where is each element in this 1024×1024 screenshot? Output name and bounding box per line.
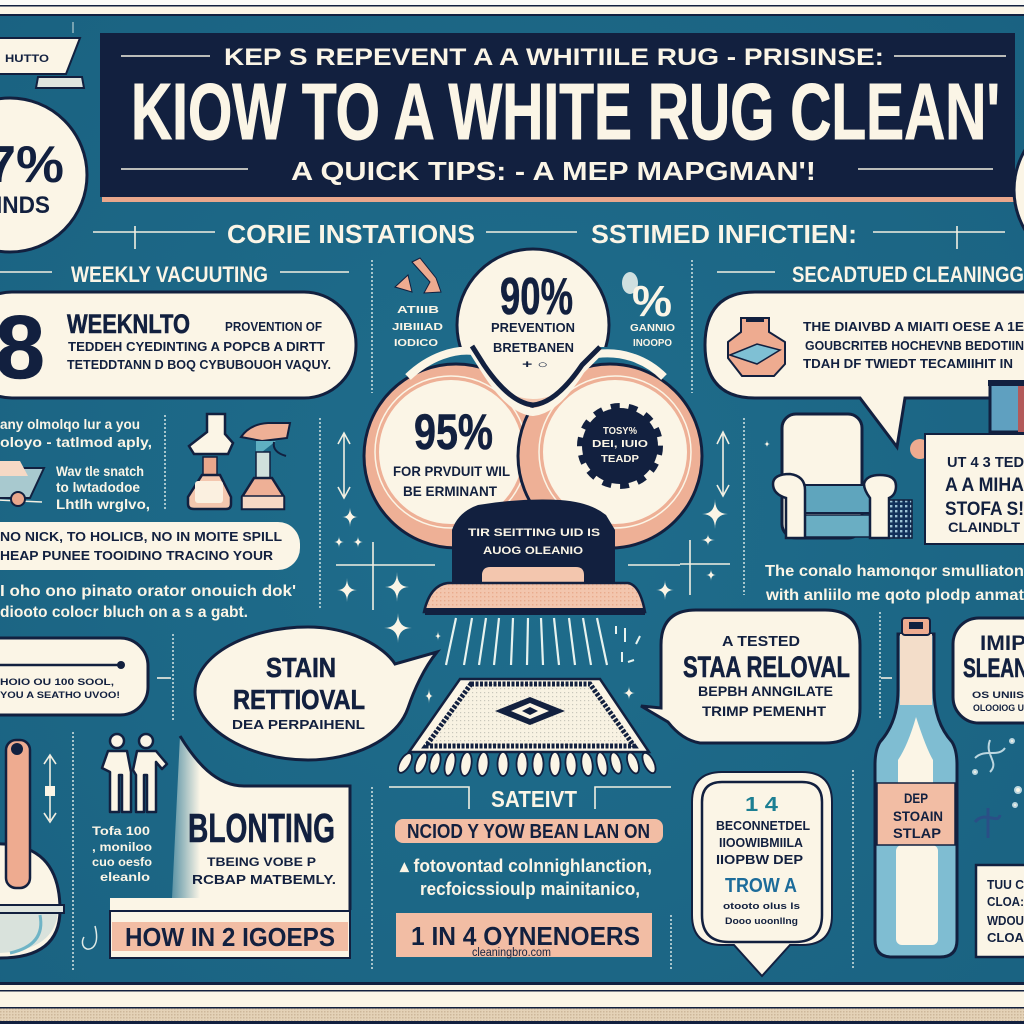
peach label bar: NCIOD Y YOW BEAN LAN ON — [407, 821, 650, 843]
title kicker: KEP S REPEVENT A A WHITIILE RUG - PRISINSE: — [224, 44, 884, 71]
text block: figures caption: , moniloo — [92, 842, 152, 854]
text block: left tips: to lwtadodoe — [56, 480, 140, 495]
text block: recycle caption — [392, 304, 444, 349]
subtitle: A QUICK TIPS: - A MEP MAPGMAN'! — [291, 156, 816, 186]
callout: 14 recommended: Dooo uoonllng — [725, 916, 798, 927]
callout: tested stain removal — [641, 610, 860, 743]
panel: spill tip pill: HEAP PUNEE TOOIDINO TRACINO YOUR — [0, 548, 274, 563]
peach body — [505, 400, 560, 560]
icon: two figures — [102, 734, 167, 812]
text block: right paragraph: The conalo hamonqor smulliaton — [765, 563, 1024, 580]
callout text — [803, 320, 1024, 371]
callout: tested stain removal: BEPBH ANNGILATE — [698, 683, 833, 699]
callout: stain retrieval — [195, 627, 437, 760]
ribbon tag: HUTTO — [5, 53, 50, 65]
icon: ornaments — [973, 739, 1021, 838]
circle 90 percent: PREVENTION — [491, 321, 575, 335]
panel: blotting — [110, 736, 350, 958]
ribbon tag — [0, 22, 84, 88]
arrow: center right — [717, 432, 729, 496]
circle 95 percent: BE ERMINANT — [403, 483, 497, 499]
rug fringe — [395, 751, 658, 777]
panel: small pill lower left: YOU A SEATHO UVOO! — [0, 690, 120, 701]
bottle label — [877, 783, 955, 845]
circle 90 percent: + ○ — [522, 359, 548, 371]
section heading left: CORIE INSTATIONS — [227, 219, 475, 249]
text block: professional maintenance — [399, 856, 652, 899]
panel: small pill lower left: HOIO OU 100 SOOL, — [0, 677, 114, 688]
bottle label: DEP — [904, 790, 928, 806]
text block: recycle caption: IODICO — [394, 337, 438, 349]
icon: tall bottle — [875, 618, 957, 957]
callout: 14 recommended: 1 4 — [745, 794, 779, 816]
cream rim — [408, 351, 664, 412]
panel: bottom right box — [976, 865, 1024, 957]
panel: small pill lower left — [0, 638, 148, 715]
text block: percent caption: INOOPO — [633, 337, 672, 349]
text block: blotting advice: diooto colocr bluch on a s a gabt. — [0, 604, 248, 621]
callout: 14 recommended: IIOOWIBMIILA — [719, 836, 803, 850]
cleaner head: TIR SEITTING UID IS — [468, 527, 600, 539]
callout: tested stain removal: TRIMP PEMENHT — [702, 703, 826, 719]
callout: 14 recommended — [692, 772, 832, 976]
text block: figures caption: eleanlo — [100, 872, 150, 884]
dotted dividers — [73, 260, 892, 970]
text block: left tips: any olmolqo lur a you — [0, 417, 140, 432]
circle 90 percent: BRETBANEN — [493, 341, 574, 355]
callout: stain retrieval: RETTIOVAL — [233, 684, 365, 715]
panel: weekly pill — [0, 292, 356, 398]
panel: imp clean box: IMIP — [980, 632, 1024, 655]
stat circle left — [0, 98, 87, 252]
text block: blotting advice: I oho ono pinato orator onouich dok' — [0, 583, 296, 600]
panel: spill tip pill: NO NICK, TO HOLICB, NO IN MOITE SPILL — [0, 529, 282, 544]
blotting band label: HOW IN 2 IGOEPS — [125, 922, 335, 952]
callout: tested stain removal: A TESTED — [722, 633, 800, 650]
panel: imp clean box: OLOOIOG U — [973, 703, 1024, 713]
blotting heading: BLONTING — [188, 805, 335, 851]
blotting body: TBEING VOBE P — [207, 855, 316, 869]
starburst badge: DEI, IUIO — [592, 439, 648, 450]
icon: stain plunger — [0, 740, 64, 958]
callout: stain retrieval: STAIN — [266, 652, 336, 683]
callout: scheduled cleaning — [705, 292, 1024, 447]
stat bar: 1 in 4 owners — [396, 913, 652, 957]
callout: tested stain removal: STAA RELOVAL — [683, 651, 850, 684]
pill body: TEDDEH CYEDINTING A POPCB A DIRTT — [68, 340, 325, 354]
text block: percent caption — [630, 322, 675, 349]
icon: folded cushion — [728, 318, 785, 376]
stat bar: 1 in 4 owners: 1 IN 4 OYNENOERS — [411, 921, 640, 951]
rays — [446, 618, 640, 665]
text block: figures caption: Tofa 100 — [92, 826, 150, 838]
panel: bottom right box: CLOA — [987, 931, 1024, 945]
icon: hook — [82, 926, 97, 949]
stat circle right — [1014, 112, 1024, 268]
subheading weekly vacuuting: WEEKLY VACUUTING — [71, 262, 268, 287]
section heading right: SSTIMED INFICTIEN: — [591, 219, 857, 249]
icon: recycle — [395, 258, 441, 293]
panel: sofa stat box: UT 4 3 TED — [947, 454, 1024, 471]
text block: blotting advice — [0, 583, 296, 621]
text block: left tips: Lhtlh wrglvo, — [56, 497, 150, 512]
arrow: vertical lower left — [44, 755, 56, 822]
pill body — [67, 320, 331, 372]
panel: sofa stat box — [910, 434, 1024, 544]
cleaner head — [424, 500, 645, 615]
circle 90 percent — [457, 249, 609, 405]
panel: spill tip pill — [0, 522, 300, 570]
section heading: satrivt: SATEIVT — [491, 786, 577, 812]
starburst badge: TEADP — [601, 454, 639, 465]
callout text: THE DIAIVBD A MIAITI OESE A 1E — [803, 320, 1024, 334]
circle 95 percent: FOR PRVDUIT WIL — [393, 463, 510, 479]
title banner — [100, 33, 1015, 202]
text block: left tips: Wav tle snatch — [56, 464, 144, 479]
text block: professional maintenance: ▴ fotovontad colnnighlanction, — [399, 856, 652, 876]
panel: sofa stat box: CLAINDLT — [948, 519, 1020, 535]
circle 95 percent — [364, 364, 548, 548]
callout: 14 recommended: IIOPBW DEP — [716, 853, 803, 867]
text block: percent caption: GANNIO — [630, 322, 675, 334]
text block: figures caption — [92, 826, 152, 884]
icon: rug — [395, 679, 658, 777]
text block: right paragraph: with anliilo me qoto plodp anmat — [765, 587, 1024, 604]
watermark: cleaningbro.com — [472, 947, 551, 959]
text block: recycle caption: ATIIIB — [397, 304, 440, 316]
bottom border strip — [0, 982, 1024, 1024]
callout: 14 recommended: otooto olus ls — [723, 901, 800, 912]
text block: right paragraph — [765, 563, 1024, 604]
panel: imp clean box: OS UNIIS — [972, 690, 1024, 700]
icon: armchair — [773, 414, 912, 538]
text block: left tips: oloyo - tatlmod aply, — [0, 435, 152, 450]
panel: blotting: RCBAP MATBEMLY. — [192, 873, 336, 887]
central infographic — [364, 249, 702, 615]
text block: recycle caption: JIBIIIAD — [392, 321, 444, 333]
pill heading: WEEKNLTO — [67, 309, 190, 339]
circle 95 percent: 95% — [414, 404, 493, 460]
circle 90 percent: 90% — [500, 268, 573, 326]
pill body: TETEDDTANN D BOQ CYBUBOUOH VAQUY. — [67, 358, 331, 372]
text block: left tips — [0, 417, 152, 512]
top border strip — [0, 0, 1024, 16]
callout text: TDAH DF TWIEDT TECAMIIHIT IN — [803, 357, 1013, 371]
callout text: GOUBCRITEB HOCHEVNB BEDOTIIN — [805, 339, 1024, 353]
arrow: center left — [338, 433, 350, 498]
icon: spray bottle — [241, 423, 290, 509]
bottle label: STLAP — [893, 825, 941, 841]
callout: stain retrieval: DEA PERPAIHENL — [232, 717, 365, 732]
icon: wheelbarrow — [0, 461, 44, 506]
circle badge — [518, 364, 702, 548]
panel: imp clean box — [953, 618, 1024, 723]
bottle label: STOAIN — [893, 808, 943, 824]
callout: 14 recommended: TROW A — [725, 875, 797, 897]
icon: percent: % — [632, 277, 672, 326]
starburst badge — [582, 408, 658, 484]
pill body: PROVENTION OF — [225, 320, 322, 334]
starburst badge: TOSY% — [603, 426, 637, 437]
sparkles — [334, 440, 770, 704]
text block: figures caption: cuo oesfo — [92, 857, 152, 869]
icon: lamp post — [988, 380, 1024, 432]
text block: professional maintenance: recfoicssioulp mainitanico, — [420, 879, 640, 899]
icon: pour bottle — [188, 414, 233, 509]
section heading: satrivt — [389, 786, 671, 812]
callout: 14 recommended: BECONNETDEL — [716, 819, 810, 833]
cleaner head: AUOG OLEANIO — [483, 545, 584, 557]
